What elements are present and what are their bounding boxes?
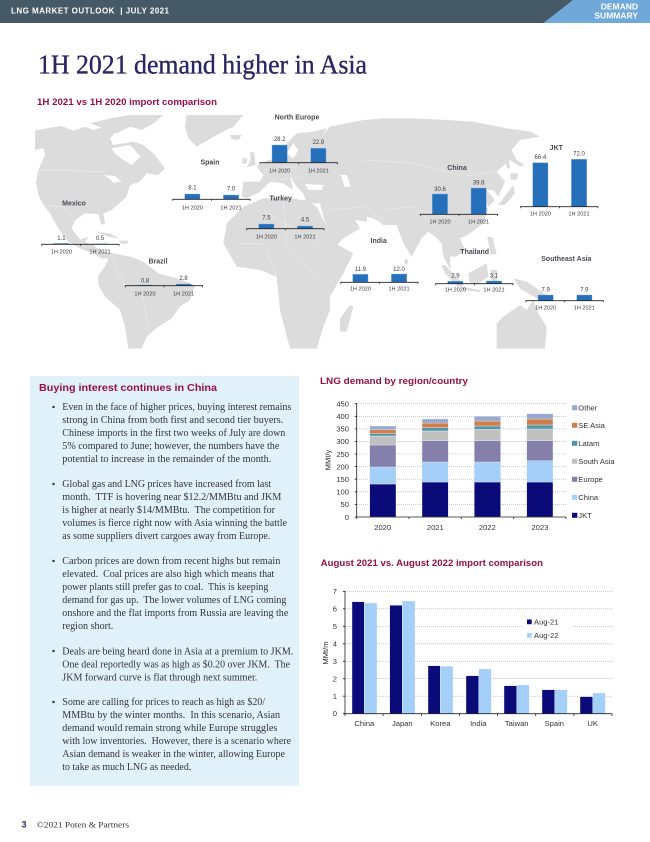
bullet text block: JKM forward curve is flat through next summer. [62, 672, 257, 683]
grouped bar chart: August imports: 7 [333, 587, 337, 596]
stacked bar chart: LNG demand: 2021 [427, 523, 444, 532]
footer: 3 [22, 820, 27, 830]
world map [35, 115, 547, 349]
chart: India: India [371, 238, 387, 245]
bullet text block: strong in China from both first and second tier buyers. [62, 415, 283, 426]
stacked bar chart: LNG demand: 100 [336, 488, 349, 497]
stacked bar chart: LNG demand: 50 [341, 500, 349, 509]
chart: Mexico: Mexico [62, 200, 86, 208]
chart: India: 11.9 [355, 267, 367, 273]
chart: India: 1H 2020 [350, 287, 371, 293]
footer: ©2021 Poten & Partners [37, 820, 129, 830]
grouped bar chart: August imports: Spain [545, 719, 564, 728]
chart: Thailand: Thailand [460, 249, 489, 256]
chart: Spain: 7.0 [227, 186, 236, 192]
chart: Mexico [42, 200, 119, 256]
chart: China: 1H 2020 [429, 220, 451, 226]
chart: JKT: 66.4 [535, 155, 547, 161]
chart: Southeast Asia: 1H 2021 [574, 306, 595, 312]
chart: Thailand: 1H 2021 [483, 288, 505, 294]
chart: Thailand [436, 249, 513, 294]
stacked bar chart: LNG demand: MMt/y [324, 449, 332, 470]
chart: North Europe: 1H 2021 [308, 169, 329, 175]
bullet text block: Carbon prices are down from recent highs but remain [62, 556, 280, 567]
bullet text block: Deals are being heard done in Asia at a premium to JKM. [62, 646, 293, 657]
chart: Brazil [125, 258, 203, 298]
chart: Mexico: 1H 2020 [51, 250, 72, 256]
chart: JKT: JKT [550, 145, 564, 152]
chart: Spain: 1H 2020 [182, 205, 203, 211]
panel: buying interest [30, 376, 299, 786]
chart: Mexico: 1H 2021 [89, 250, 111, 256]
bullet text block: to take as much LNG as needed. [62, 762, 191, 773]
chart: Brazil: 0.8 [141, 278, 150, 284]
chart: Southeast Asia: 1H 2020 [535, 306, 556, 312]
legend: demand regions: Other [578, 403, 598, 412]
legend: demand regions: Latam [578, 439, 599, 448]
chart: North Europe: North Europe [275, 114, 319, 122]
stacked bar chart: LNG demand: 200 [336, 462, 349, 471]
bullet text block: Even in the face of higher prices, buying interest remains [62, 402, 291, 413]
legend: demand regions: Europe [578, 475, 603, 484]
chart: China: China [447, 165, 467, 172]
chart: Spain: Spain [200, 160, 220, 166]
bullet text block: Asian demand is weaker in the winter, allowing Europe [62, 749, 286, 760]
chart: Turkey: 1H 2021 [294, 235, 316, 241]
bullet text block [52, 402, 293, 773]
chart: North Europe [260, 114, 337, 175]
chart: North Europe: 1H 2020 [269, 169, 290, 175]
header bar [0, 0, 650, 23]
chart: India: 1H 2021 [388, 287, 410, 293]
grouped bar chart: August imports: 5 [333, 622, 337, 631]
grouped bar chart: August imports: Japan [392, 719, 413, 728]
legend: Aug-21 and Aug-22: Aug-21 [534, 618, 558, 627]
bullet text block: month. TTF is hovering near $12.2/MMBtu and JKM [62, 492, 281, 503]
chart: Mexico: 0.5 [96, 236, 105, 242]
chart: China: 1H 2021 [468, 220, 489, 226]
chart: China: 39.8 [473, 180, 485, 186]
chart: India [341, 238, 418, 293]
chart: North Europe: 28.2 [274, 137, 286, 143]
chart: Brazil: Brazil [148, 258, 168, 266]
chart: Thailand: 2.9 [451, 274, 460, 280]
legend: demand regions: China [578, 493, 599, 502]
chart: JKT: 72.0 [573, 152, 585, 158]
chart: Thailand: 3.1 [490, 274, 499, 280]
stacked bar chart: LNG demand: 2022 [479, 523, 496, 532]
stacked bar chart: LNG demand: 2020 [374, 523, 391, 532]
bullet text block: region short. [62, 621, 113, 632]
chart: Southeast Asia: 7.9 [580, 288, 589, 294]
grouped bar chart: August imports: India [470, 719, 487, 728]
bullet text block: potential to increase in the remainder of the month. [62, 454, 271, 465]
bullet text block: with low inventories. However, there is a scenario where [62, 736, 292, 747]
legend: demand regions [572, 403, 615, 520]
chart: China: 30.6 [434, 187, 446, 193]
chart: JKT: 1H 2020 [530, 212, 551, 218]
legend: Aug-21 and Aug-22 [527, 618, 558, 640]
bullet text block: is higher at nearly $14/MMBtu. The competition for [62, 505, 276, 516]
grouped bar chart: August imports: 4 [333, 640, 337, 648]
chart: Brazil: 1H 2020 [134, 292, 156, 298]
bullet text block: power plants still prefer gas to coal. This is keeping [62, 582, 268, 593]
header bar: DEMAND [601, 2, 638, 12]
stacked bar chart: LNG demand: 350 [336, 425, 349, 434]
chart: Turkey: 7.5 [262, 216, 271, 222]
heading: LNG demand: LNG demand by region/country [320, 376, 468, 386]
chart: Turkey: 4.5 [301, 218, 310, 224]
chart: Turkey [247, 196, 324, 241]
grouped bar chart: August imports: 1 [333, 692, 337, 701]
grouped bar chart: August imports: China [354, 719, 375, 728]
bullet text block: elevated. Coal prices are also high which means that [62, 569, 275, 580]
bullet text block: demand for gas up. The lower volumes of LNG coming [62, 595, 286, 606]
header bar: LNG MARKET OUTLOOK | JULY 2021 [11, 7, 170, 16]
map heading: 1H 2021 vs 1H 2020 import comparison [37, 97, 217, 107]
grouped bar chart: August imports: Korea [430, 719, 451, 728]
grouped bar chart: August imports [321, 587, 612, 728]
footer [22, 820, 129, 830]
bullet text block: demand would remain strong while Europe struggles [62, 723, 277, 734]
chart: Spain: 1H 2021 [220, 205, 242, 211]
chart: Spain [173, 160, 250, 211]
bullet text block: Global gas and LNG prices have increased from last [62, 479, 271, 490]
chart: Brazil: 1H 2021 [173, 292, 194, 298]
chart: Southeast Asia [526, 256, 603, 312]
chart: Mexico: 1.1 [57, 236, 66, 242]
legend: Aug-21 and Aug-22: Aug-22 [534, 631, 558, 640]
bullet text block: onshore and the flat imports from Russia are leaving the [62, 608, 289, 619]
stacked bar chart: LNG demand: 0 [345, 513, 349, 522]
chart: Brazil: 2.8 [179, 276, 188, 282]
stacked bar chart: LNG demand: 400 [336, 412, 349, 421]
title: 1H 2021 demand higher in Asia [38, 49, 367, 79]
legend: demand regions: SE Asia [578, 421, 606, 430]
stacked bar chart: LNG demand: 300 [336, 437, 349, 446]
grouped bar chart: August imports: 2 [333, 674, 337, 683]
bullet text block: 5% compared to June; however, the numbers have the [62, 441, 280, 452]
grouped bar chart: August imports: Taiwan [505, 719, 529, 728]
chart: North Europe: 22.9 [312, 140, 325, 146]
stacked bar chart: LNG demand: 250 [336, 450, 349, 459]
grouped bar chart: August imports: MMt/m [321, 641, 330, 665]
chart: Southeast Asia: Southeast Asia [541, 256, 592, 263]
grouped bar chart: August imports: 0 [333, 709, 337, 718]
stacked bar chart: LNG demand: 450 [336, 400, 349, 408]
chart: JKT: 1H 2021 [568, 212, 590, 218]
stacked bar chart: LNG demand [324, 400, 615, 532]
chart: Turkey: Turkey [269, 196, 292, 202]
chart: India: 12.0 [393, 267, 405, 273]
chart: Spain: 8.1 [188, 185, 197, 191]
bullet text block: Some are calling for prices to reach as high as $20/ [62, 697, 265, 708]
chart: Southeast Asia: 7.9 [542, 288, 551, 294]
legend: demand regions: South Asia [578, 457, 615, 466]
header bar: SUMMARY [594, 11, 638, 21]
bullet text block: volumes is fierce right now with Asia winning the battle [62, 518, 288, 529]
bullet text block: Chinese imports in the first two weeks of July are down [62, 428, 285, 439]
heading: import comparison: August 2021 vs. August 2022 import comparison [321, 558, 543, 568]
bullet text block: as some suppliers divert cargoes away from Europe. [62, 531, 270, 542]
stacked bar chart: LNG demand: 150 [336, 475, 349, 484]
grouped bar chart: August imports: 3 [333, 657, 337, 666]
bullet text block: MMBtu by the winter months. In this scenario, Asian [62, 710, 280, 721]
chart: Turkey: 1H 2020 [256, 235, 277, 241]
bullet text block: One deal reportedly was as high as $0.20 over JKM. The [62, 659, 291, 670]
legend: demand regions: JKT [578, 511, 592, 520]
panel heading: Buying interest continues in China [39, 382, 217, 394]
stacked bar chart: LNG demand: 2023 [532, 523, 548, 532]
chart: Thailand: 1H 2020 [445, 288, 466, 294]
chart: JKT [521, 145, 598, 218]
grouped bar chart: August imports: 6 [333, 604, 337, 614]
chart: China [420, 165, 498, 226]
grouped bar chart: August imports: UK [587, 719, 598, 728]
